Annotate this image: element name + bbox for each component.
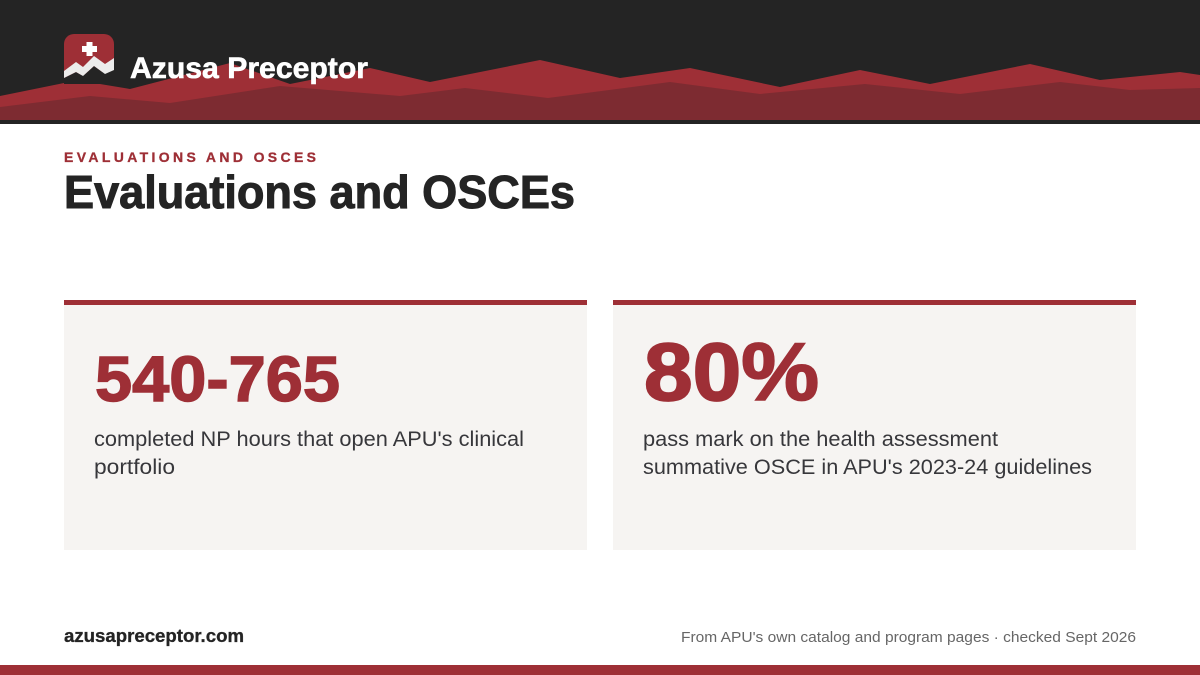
brand name: Azusa Preceptor [130, 52, 368, 85]
back mountain range [0, 82, 1200, 120]
header banner [0, 0, 1200, 124]
title: Evaluations and OSCEs [64, 166, 575, 218]
stat description: summative OSCE in APU's 2023-24 guidelines [643, 455, 1092, 479]
panel: pass mark stat card [613, 300, 1136, 550]
eyebrow label: EVALUATIONS AND OSCES [64, 149, 316, 165]
icon: logo mountain with cross [64, 34, 114, 84]
stat description: pass mark on the health assessment [643, 427, 998, 451]
footer source note: From APU's own catalog and program pages · checked Sept 2026 [681, 629, 1136, 646]
footer bar [0, 665, 1200, 675]
stat: 540-765: 540-765 [95, 343, 340, 415]
stat: 80%: 80% [644, 327, 819, 418]
front mountain range [0, 60, 1200, 120]
panel: hours stat card [64, 300, 587, 550]
stat description: completed NP hours that open APU's clinical [94, 427, 524, 451]
stat description: portfolio [94, 455, 175, 479]
footer website: azusapreceptor.com [64, 626, 244, 646]
